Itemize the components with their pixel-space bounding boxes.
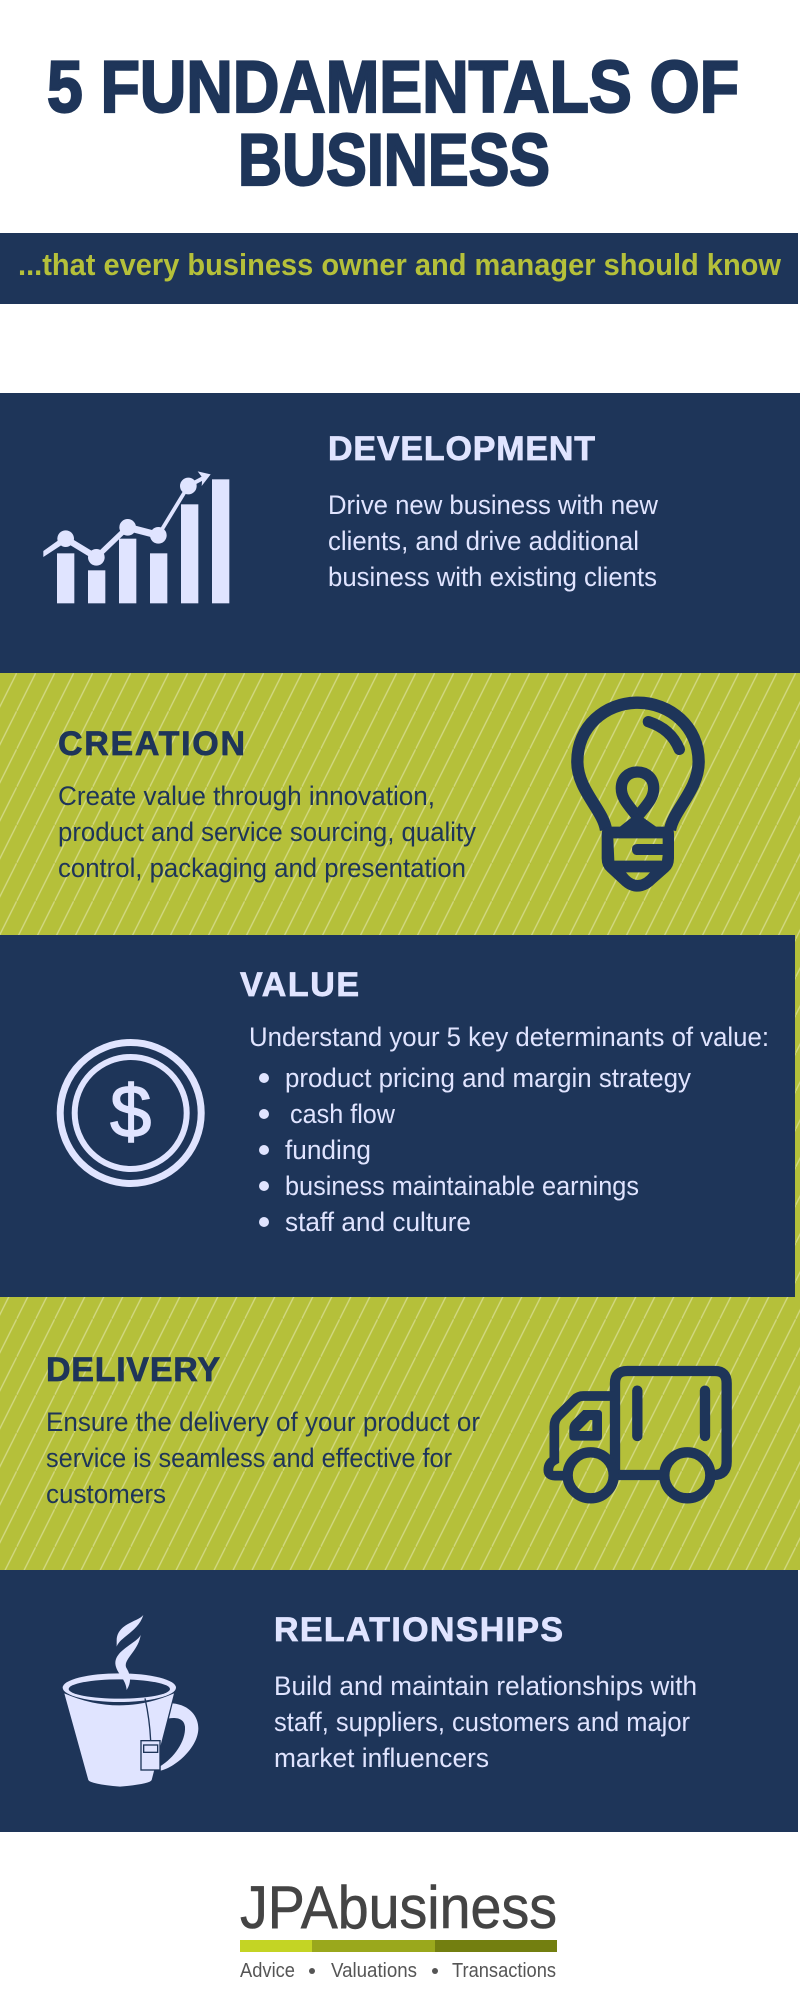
- list: value determinants: cash flow: [290, 1099, 395, 1129]
- subtitle band: [0, 233, 798, 304]
- text: relationships description: staff, suppliers, customers and major: [274, 1707, 690, 1737]
- heading: creation: CREATION: [58, 725, 245, 763]
- panel: relationships: [0, 1570, 798, 1832]
- title: [47, 47, 739, 201]
- text: relationships description: Build and maintain relationships with: [274, 1671, 697, 1701]
- icon: dollar coin: [60, 1042, 201, 1184]
- icon: rising bar chart: [43, 471, 229, 603]
- heading: delivery: DELIVERY: [46, 1351, 220, 1389]
- logo: JPAbusiness: [240, 1874, 557, 1982]
- heading: relationships: RELATIONSHIPS: [274, 1611, 563, 1649]
- panel: striped green background: [0, 673, 800, 1570]
- logo: JPAbusiness: Transactions: [452, 1960, 556, 1982]
- text: development description: [328, 490, 658, 592]
- logo: JPAbusiness: Advice: [240, 1960, 295, 1982]
- logo: JPAbusiness: JPAbusiness: [240, 1874, 557, 1941]
- text: creation description: [58, 781, 476, 883]
- text: creation description: control, packaging and presentation: [58, 853, 466, 883]
- text: delivery description: [46, 1407, 480, 1509]
- text: development description: clients, and drive additional: [328, 526, 639, 556]
- text: relationships description: [274, 1671, 697, 1773]
- text: development description: Drive new business with new: [328, 490, 658, 520]
- text: development description: business with existing clients: [328, 562, 657, 592]
- text: delivery description: service is seamless and effective for: [46, 1443, 452, 1473]
- text: delivery description: Ensure the delivery of your product or: [46, 1407, 480, 1437]
- panel: development: [0, 393, 800, 673]
- icon: light bulb: [577, 703, 699, 892]
- heading: value: VALUE: [240, 966, 359, 1004]
- list: value determinants: business maintainable earnings: [285, 1171, 639, 1201]
- panel: creation: [58, 703, 699, 892]
- title: BUSINESS: [238, 120, 550, 201]
- icon: dollar coin: $: [110, 1070, 151, 1153]
- panel: value: [0, 935, 795, 1297]
- heading: development: DEVELOPMENT: [328, 430, 595, 468]
- logo: JPAbusiness: Valuations: [331, 1960, 417, 1982]
- list: value determinants: staff and culture: [285, 1207, 471, 1237]
- text: creation description: product and service sourcing, quality: [58, 817, 476, 847]
- icon: delivery truck: [548, 1371, 727, 1498]
- text: creation description: Create value through innovation,: [58, 781, 435, 811]
- list: value determinants: [259, 1063, 691, 1237]
- text: value intro: Understand your 5 key determinants of value:: [249, 1022, 769, 1052]
- icon: tea cup: [63, 1615, 198, 1787]
- text: relationships description: market influencers: [274, 1743, 489, 1773]
- text: delivery description: customers: [46, 1479, 166, 1509]
- list: value determinants: funding: [285, 1135, 371, 1165]
- panel: delivery: [46, 1351, 727, 1509]
- list: value determinants: product pricing and margin strategy: [285, 1063, 691, 1093]
